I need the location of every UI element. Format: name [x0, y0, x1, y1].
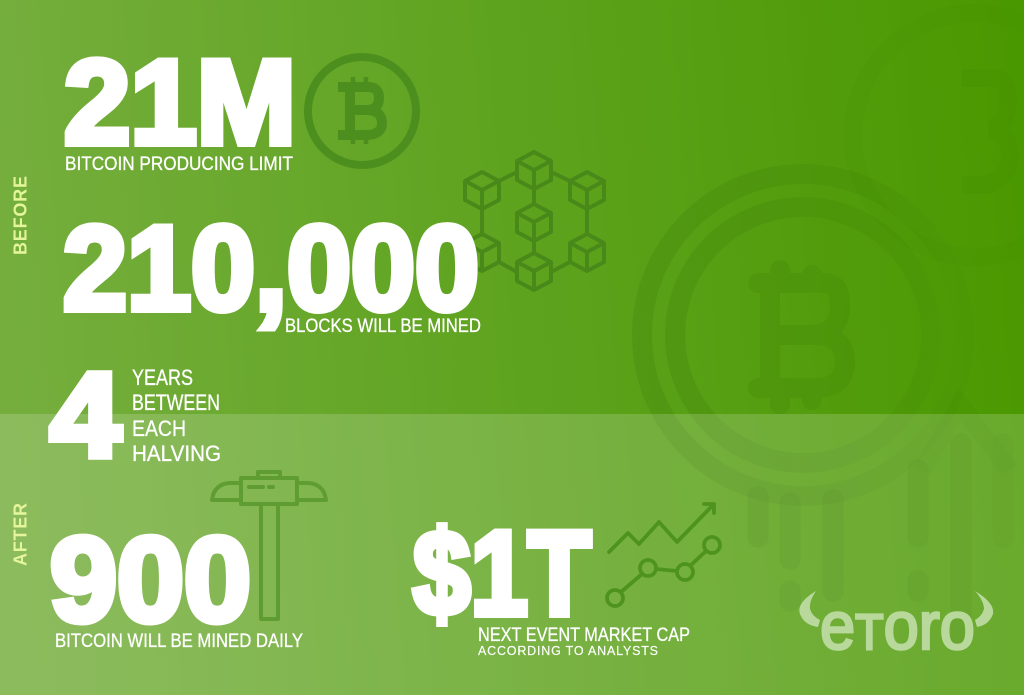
stat: 4: 4 [50, 348, 121, 482]
background watermark: bitcoin coins and drips [642, 13, 1024, 640]
caption: next event market cap: NEXT EVENT MARKET CAP [478, 624, 690, 646]
watermark: upper right coin [853, 13, 1024, 257]
caption: years between each halving: BETWEEN [132, 390, 220, 415]
logo: etoro [799, 588, 993, 663]
caption: years between each halving: YEARS [132, 365, 193, 390]
logo: horns [799, 591, 993, 627]
logo: wordmark: eToro [820, 588, 975, 663]
label: before: BEFORE [10, 176, 30, 255]
stat: $1T: $1T [413, 506, 591, 640]
stat: 210,000: 210,000 [63, 202, 479, 336]
watermark: diagonal strokes [922, 405, 1010, 470]
icon: pickaxe [212, 472, 326, 619]
caption: years between each halving [132, 365, 221, 466]
stat: 21M: 21M [64, 36, 296, 170]
icon: blockchain network of cubes [465, 152, 604, 290]
caption: years between each halving: EACH [132, 416, 186, 441]
caption: years between each halving: HALVING [132, 441, 221, 466]
watermark: drips [758, 444, 1003, 640]
caption: according to analysts: ACCORDING TO ANALYSTS [478, 644, 658, 658]
icon: growth line charts [607, 504, 720, 606]
icon: bitcoin coin [308, 57, 416, 165]
lower "after" band [0, 414, 1024, 695]
label: after: AFTER [10, 503, 30, 566]
stat: 900: 900 [50, 513, 251, 647]
caption: bitcoin will be mined daily: BITCOIN WILL BE MINED DAILY [55, 630, 303, 652]
watermark: large bitcoin symbol [758, 270, 845, 404]
watermark: upper right bitcoin symbol [962, 78, 1010, 185]
watermark: large coin rings [642, 174, 964, 496]
caption: blocks will be mined: BLOCKS WILL BE MINED [285, 315, 481, 337]
caption: bitcoin producing limit: BITCOIN PRODUCING LIMIT [65, 153, 293, 175]
